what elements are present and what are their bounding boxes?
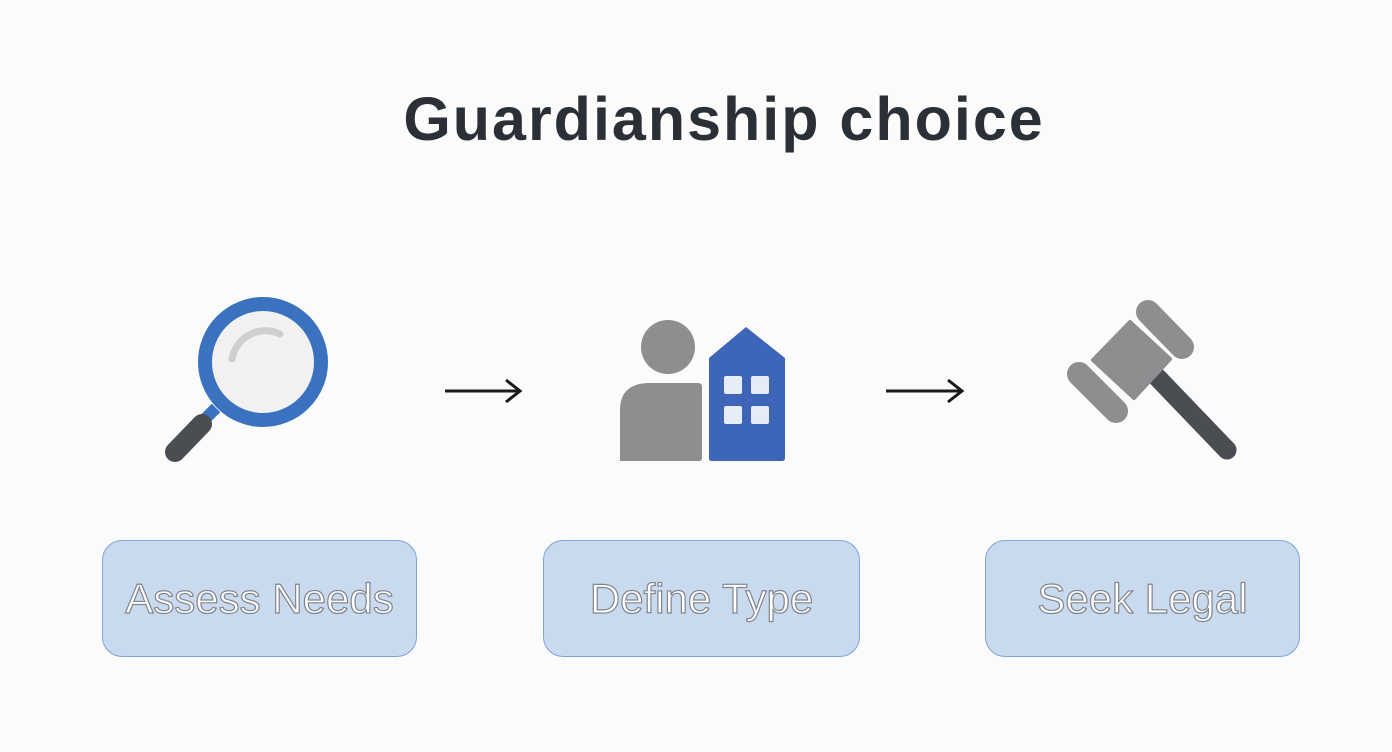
title: Guardianship choice	[403, 85, 1045, 153]
arrow 2	[886, 380, 962, 402]
step box: Assess Needs	[102, 540, 417, 657]
icon: gavel	[1079, 312, 1227, 450]
arrow 1	[445, 380, 520, 402]
icon: magnifying glass	[175, 304, 321, 452]
step box: Define Type: Define Type	[590, 574, 813, 622]
icon: person and building	[620, 320, 785, 461]
step box: Seek Legal	[985, 540, 1300, 657]
step box: Assess Needs: Assess Needs	[125, 574, 394, 622]
step box: Define Type	[543, 540, 860, 657]
step box: Seek Legal: Seek Legal	[1037, 574, 1248, 622]
